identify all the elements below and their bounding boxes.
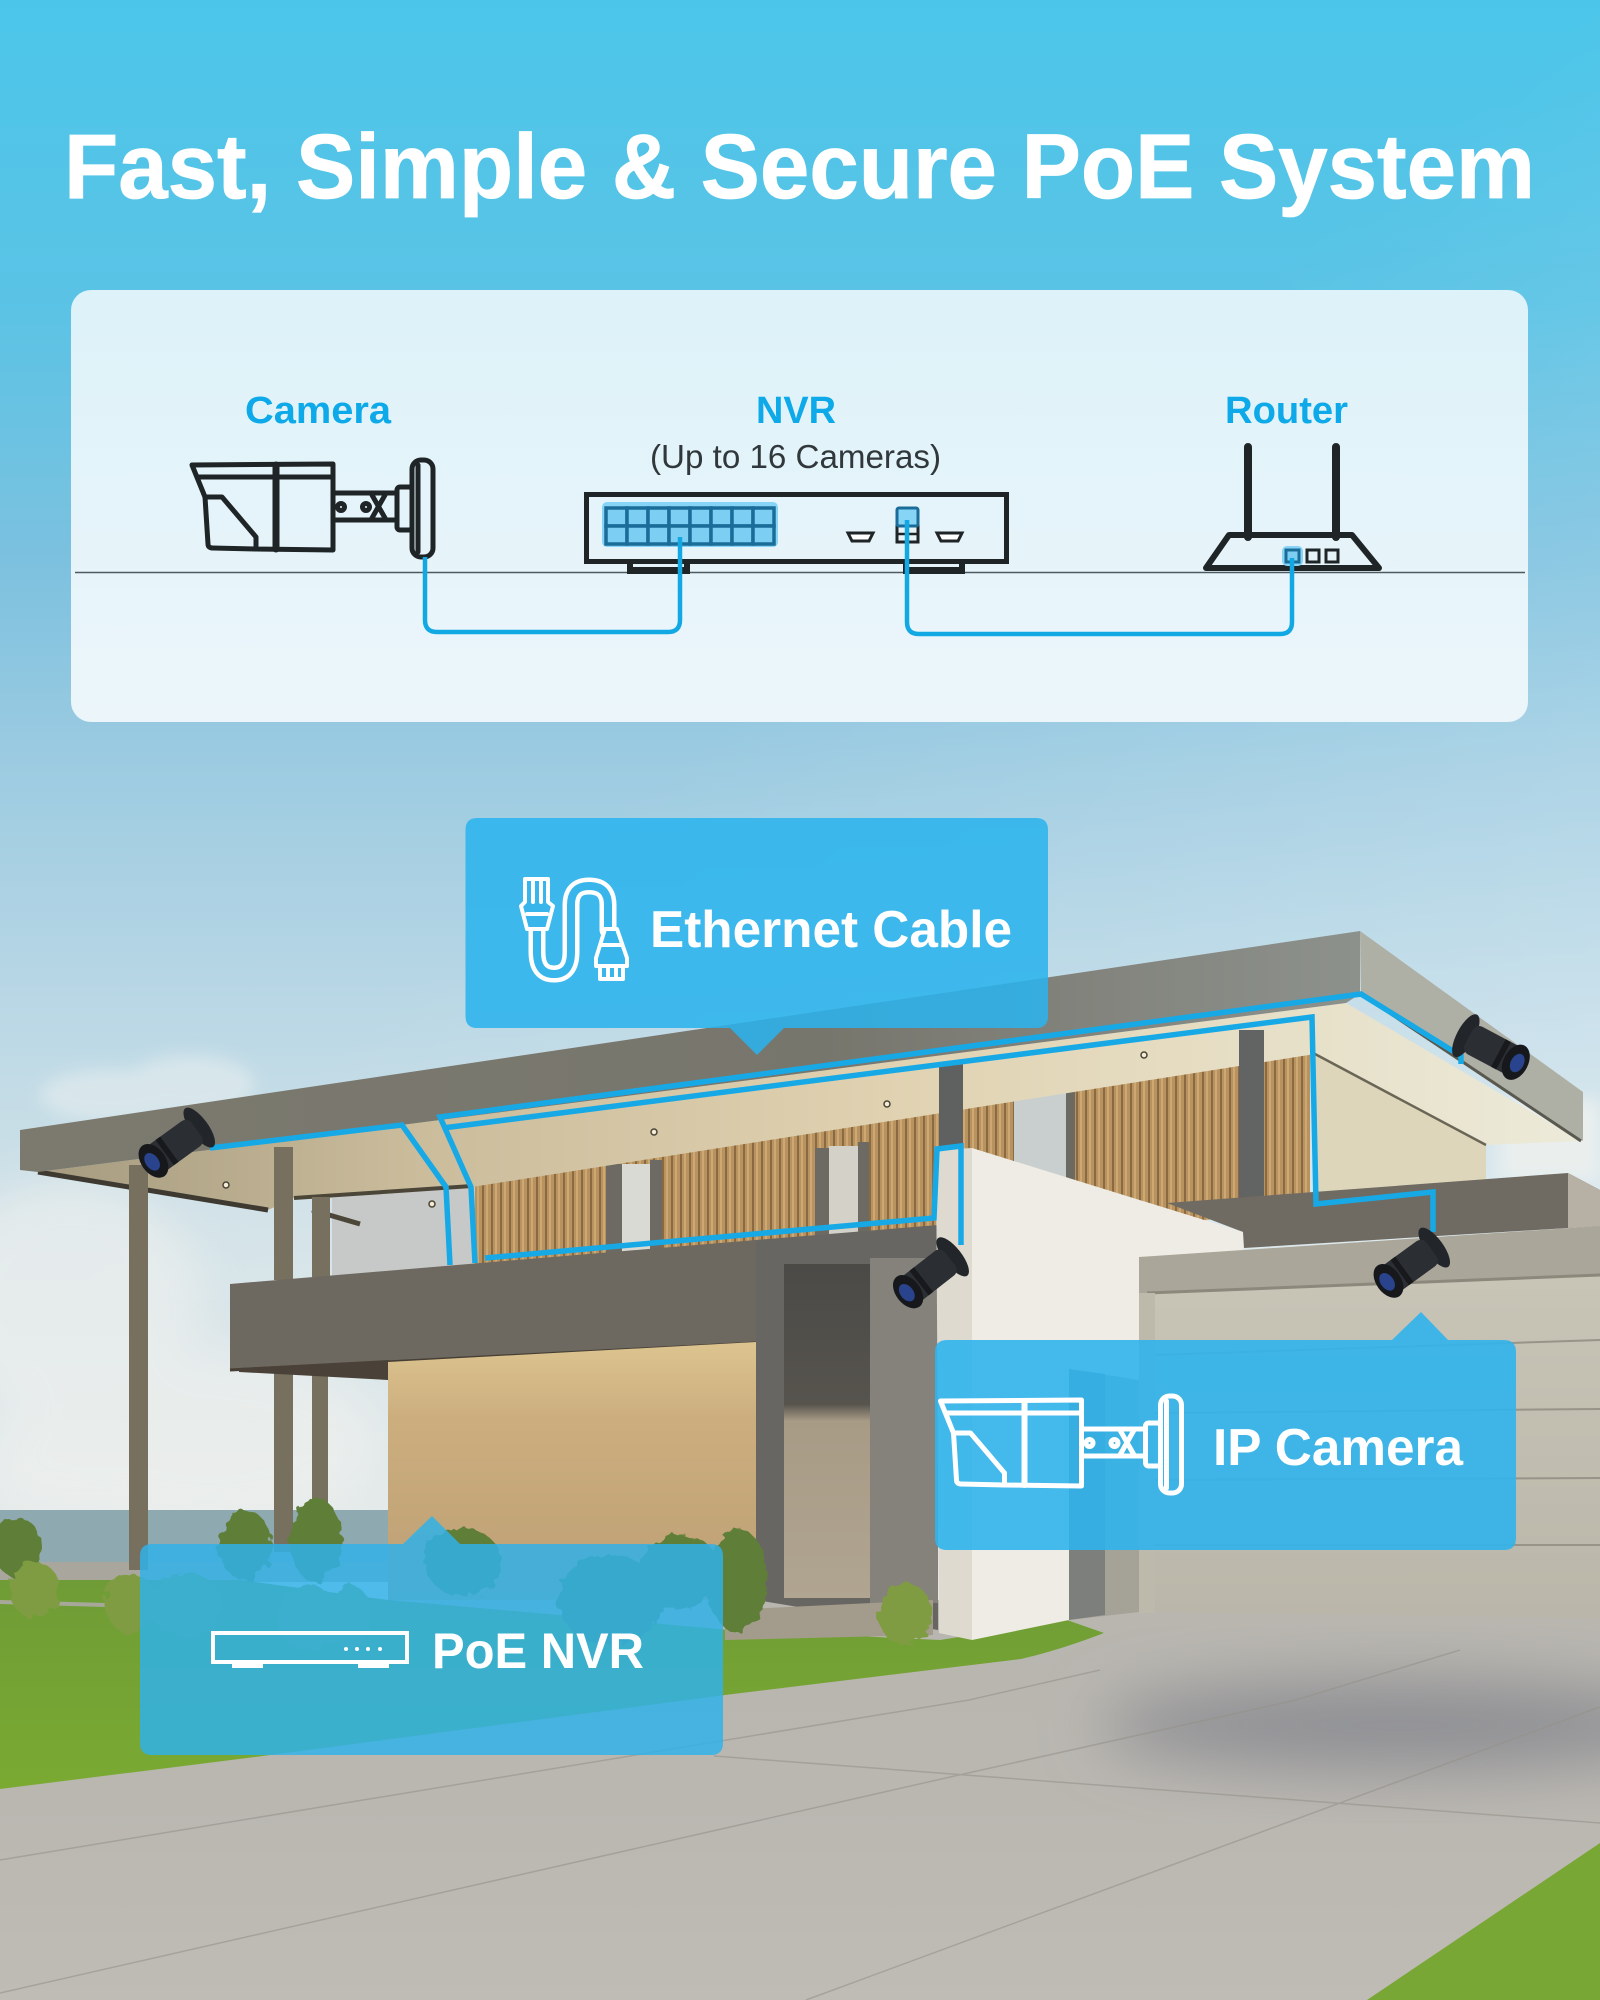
callout: IP Camera <box>935 1312 1516 1550</box>
wood wall panel <box>388 1342 756 1600</box>
back band <box>1167 1173 1600 1248</box>
wood slats behind <box>475 1054 1310 1280</box>
cable: NVR to router <box>907 520 1292 634</box>
recess doorway <box>1069 1369 1139 1620</box>
PoE port block <box>602 502 778 547</box>
icon: NVR outline white <box>211 1633 409 1668</box>
security camera: garage <box>1365 1223 1456 1307</box>
video ports <box>848 533 962 541</box>
white wall <box>972 1148 1243 1640</box>
label: PoE NVR: PoE NVR <box>432 1623 644 1679</box>
cable: camera to NVR <box>425 537 680 632</box>
icon: camera outline white <box>940 1396 1182 1493</box>
roof side <box>1360 931 1583 1141</box>
window bays <box>606 1082 1075 1264</box>
callout: PoE NVR <box>140 1516 723 1755</box>
garage door <box>1147 1275 1600 1618</box>
Ethernet cable routes on house <box>210 994 1461 1265</box>
stone path <box>725 1600 933 1640</box>
soffit <box>38 1003 1581 1210</box>
panel: connection diagram <box>71 290 1528 722</box>
title: Fast, Simple & Secure PoE System <box>64 116 1535 218</box>
icon: router <box>1206 447 1379 568</box>
security camera: centre pillar <box>884 1233 974 1318</box>
scene: shrubs <box>0 1498 932 1650</box>
fascia front <box>20 931 1360 1172</box>
scene: house <box>20 931 1600 1640</box>
label: Ethernet Cable: Ethernet Cable <box>650 901 1012 959</box>
label: Camera: Camera <box>245 390 392 432</box>
callout: Ethernet Cable <box>466 818 1048 1055</box>
icon: ethernet cable <box>521 879 627 979</box>
slim columns <box>129 1147 330 1570</box>
uplink port <box>897 526 918 542</box>
cream right wall <box>1315 1054 1486 1205</box>
label: up to 16 cameras: (Up to 16 Cameras) <box>650 438 941 475</box>
label: IP Camera: IP Camera <box>1213 1419 1464 1477</box>
under-balcony ceiling <box>239 1360 388 1380</box>
left glass room <box>332 1186 475 1290</box>
scene: sea and horizon <box>0 1510 400 1582</box>
icon: camera outline <box>192 460 433 557</box>
scene: lawn <box>0 1580 1600 2000</box>
ceiling lights <box>223 1052 1147 1207</box>
ground line <box>75 572 1525 574</box>
security camera: left eave <box>130 1103 221 1187</box>
security camera: right eave <box>1447 1010 1538 1089</box>
grey entrance wall <box>756 1225 938 1630</box>
icon: NVR recorder <box>586 494 1006 574</box>
scene: concrete driveway <box>0 1600 1600 2000</box>
garage top band <box>1139 1226 1600 1293</box>
label: NVR: NVR <box>756 390 836 432</box>
balcony <box>230 1240 756 1370</box>
label: Router: Router <box>1225 390 1348 432</box>
